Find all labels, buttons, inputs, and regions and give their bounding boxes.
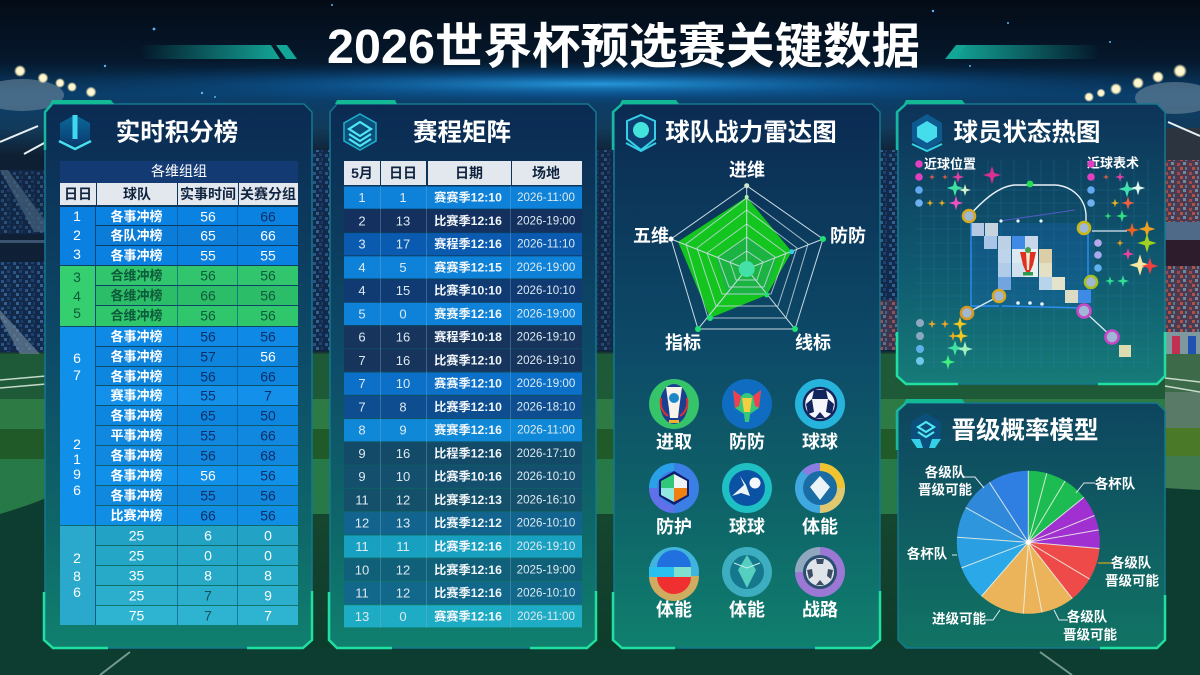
icon: schedule layers <box>344 114 376 150</box>
panel: radar <box>613 100 880 648</box>
legend: top left: 近球位置 <box>924 156 976 172</box>
table: schedule: 赛赛季12:16 <box>434 422 502 437</box>
table: schedule: 2026-10:10 <box>517 517 575 530</box>
rows: teal group: 9 <box>264 588 272 604</box>
table: schedule: 日日 <box>389 165 417 181</box>
rows: light blue group: 56 <box>260 468 276 484</box>
table: standings: 2 <box>73 436 81 452</box>
rows: green group: 合维冲榜 <box>110 308 163 323</box>
heading: radar: 球队战力雷达图 <box>665 118 837 146</box>
rows: light blue group: 56 <box>260 348 276 364</box>
table: schedule <box>344 161 582 628</box>
rows: green group: 56 <box>200 268 216 284</box>
table: schedule: 比程季12:16 <box>434 446 502 460</box>
rows: blue group: 各事冲榜 <box>110 248 163 263</box>
table: schedule: 2026-10:10 <box>517 586 575 600</box>
legend: top right: 近球表术 <box>1087 156 1139 170</box>
panel: standings <box>44 100 312 648</box>
table: schedule: 2026-11:00 <box>517 424 575 437</box>
pie chart: 各级队 <box>1111 554 1152 570</box>
icon: player hex <box>912 114 942 151</box>
icon: heatmap trophy <box>1020 247 1036 276</box>
pie chart: 晋级可能 <box>1105 572 1159 588</box>
rows: blue group: 66 <box>260 208 276 224</box>
label: protect: 防护 <box>656 516 692 537</box>
table: schedule: 10 <box>355 562 369 577</box>
label: stamina: 体能 <box>802 517 838 537</box>
table: schedule: 3 <box>358 237 366 252</box>
table: schedule: 2026-19:00 <box>517 261 575 274</box>
table: schedule: 2026-11:00 <box>517 610 575 623</box>
legend: bottom left <box>916 317 973 369</box>
rows: blue group: 65 <box>200 228 216 244</box>
table: schedule: 4 <box>358 283 366 298</box>
table: schedule: 比赛季10:10 <box>434 283 502 298</box>
rows: light blue group: 平事冲榜 <box>110 428 163 443</box>
table: schedule: 2026-10:10 <box>517 470 575 483</box>
table: schedule: 12 <box>396 562 410 577</box>
table: schedule: 8 <box>358 423 366 438</box>
heading: schedule: 赛程矩阵 <box>413 118 511 146</box>
label: defence: 防防 <box>729 431 765 452</box>
label: tactics: 战路 <box>802 600 838 620</box>
table: standings: 3 <box>73 246 81 262</box>
icon: tactics ball <box>795 547 845 597</box>
rows: light blue group: 55 <box>200 428 216 444</box>
heatmap chart <box>915 156 1158 370</box>
table: schedule: 12 <box>396 492 410 508</box>
table: schedule: 比赛季12:10 <box>434 399 502 414</box>
table: schedule: 7 <box>358 353 366 368</box>
table: schedule: 比赛季12:16 <box>434 562 502 577</box>
table: schedule: 16 <box>396 330 410 345</box>
icon: attack trophy <box>649 379 699 429</box>
table: standings: 6 <box>73 482 81 498</box>
table: schedule: 2 <box>358 213 366 228</box>
rows: light blue group <box>96 327 298 525</box>
table: schedule: 13 <box>396 516 410 531</box>
table: schedule: 13 <box>355 609 369 624</box>
table: standings: 2 <box>73 227 81 243</box>
title decoration: left bars <box>140 45 297 59</box>
rows: green group: 各维冲榜 <box>110 288 163 303</box>
table: standings: 关赛分组 <box>240 186 296 202</box>
radar chart: 线标 <box>795 333 831 353</box>
rows: light blue group: 各事冲榜 <box>110 408 163 423</box>
rows: teal group: 7 <box>204 588 212 604</box>
table: schedule: 赛赛季12:15 <box>434 259 502 274</box>
title decoration: right bars <box>945 45 1100 59</box>
table: schedule: 比赛季12:16 <box>434 213 502 228</box>
table: schedule: 赛程季10:18 <box>434 329 502 344</box>
table: schedule: 4 <box>358 260 366 275</box>
icon: shield <box>649 463 699 513</box>
table: schedule: 5月 <box>351 165 373 181</box>
rows: light blue group: 56 <box>200 368 216 384</box>
table: schedule: 2026-19:00 <box>517 377 575 390</box>
icon: defence trophy <box>722 379 772 429</box>
table: schedule: 11 <box>355 539 369 554</box>
table: schedule: 赛赛季12:16 <box>434 306 502 321</box>
table: schedule: 赛赛季12:10 <box>434 376 502 391</box>
rows: teal group: 25 <box>129 528 144 544</box>
rows: light blue group: 55 <box>200 388 216 404</box>
rows: light blue group: 56 <box>260 488 276 504</box>
table: schedule: 12 <box>355 516 369 531</box>
table: standings: 4 <box>73 288 81 304</box>
rows: teal group: 75 <box>129 608 144 624</box>
pie chart <box>907 464 1159 642</box>
table: standings: 8 <box>73 568 81 584</box>
icon: stamina diamond <box>795 463 845 513</box>
icon: stamina flag <box>649 547 699 601</box>
table: schedule: 15 <box>396 283 410 298</box>
table: schedule: 7 <box>358 400 366 414</box>
table: schedule: 10 <box>396 376 410 391</box>
table: standings: 1 <box>73 208 81 224</box>
label: ball: 球球 <box>802 432 838 452</box>
table: schedule: 赛程季12:16 <box>434 236 502 251</box>
table: schedule: 2025-19:00 <box>517 563 575 576</box>
pie chart: 各级队 <box>925 464 966 480</box>
rows: green group: 56 <box>260 288 276 304</box>
panel: player heatmap <box>897 100 1165 384</box>
rows: teal group <box>96 526 298 625</box>
pie chart: 晋级可能 <box>918 482 972 498</box>
rows: teal group: 7 <box>264 608 272 624</box>
icon grid <box>649 379 845 620</box>
rows: teal group: 6 <box>204 528 212 544</box>
radar chart: 防防 <box>830 225 866 246</box>
rows: teal group: 8 <box>204 568 212 584</box>
label: stamina 2: 体能 <box>656 600 692 620</box>
table: schedule: 2026-11:00 <box>517 191 575 204</box>
table: standings: 5 <box>73 305 81 321</box>
icon: stamina crystal <box>722 547 772 597</box>
table: schedule: 16 <box>396 446 410 461</box>
rows: light blue group: 各事冲榜 <box>110 468 163 483</box>
rows: light blue group: 56 <box>200 328 216 344</box>
legend: top right <box>1087 156 1145 222</box>
rows: light blue group: 各事冲榜 <box>110 448 163 463</box>
table: schedule: 0 <box>399 306 407 321</box>
rows: teal group: 8 <box>264 568 272 584</box>
rows: light blue group: 55 <box>200 488 216 504</box>
rows: blue group: 55 <box>260 248 276 264</box>
rows: light blue group: 68 <box>260 448 276 464</box>
table: standings: 球队 <box>123 186 151 202</box>
table: schedule: 赛赛季12:10 <box>434 190 502 205</box>
table: schedule: 2026-16:10 <box>517 494 575 506</box>
table: schedule: 13 <box>396 213 410 228</box>
rows: light blue group: 56 <box>200 448 216 464</box>
rows: light blue group: 66 <box>260 428 276 444</box>
table: standings: 日日 <box>64 186 92 202</box>
rows: light blue group: 66 <box>200 508 216 524</box>
table: standings: 7 <box>73 367 81 383</box>
table: schedule: 2026-19:10 <box>517 540 575 553</box>
table: standings: 6 <box>73 584 81 600</box>
table: standings <box>60 161 298 625</box>
table: schedule: 11 <box>355 586 369 600</box>
table: schedule: 8 <box>399 400 407 414</box>
rows: green group <box>96 266 298 326</box>
table: schedule: 7 <box>358 376 366 391</box>
rows: light blue group: 65 <box>200 408 216 424</box>
table: standings: 3 <box>73 269 81 285</box>
rows: teal group: 0 <box>264 548 272 564</box>
table: schedule: 9 <box>358 446 366 461</box>
pie chart: 进级可能 <box>932 610 986 626</box>
heading: standings: 实时积分榜 <box>116 118 238 146</box>
table: standings: 实事时间 <box>180 186 236 202</box>
rows: teal group: 25 <box>129 588 144 604</box>
rows: light blue group: 56 <box>200 468 216 484</box>
rows: green group: 66 <box>200 288 216 304</box>
rows: light blue group: 56 <box>260 328 276 344</box>
table: schedule: 11 <box>355 492 369 508</box>
table: schedule: 赛赛季12:16 <box>434 608 502 623</box>
table: standings: 1 <box>73 451 81 467</box>
table: standings: 6 <box>73 350 81 366</box>
rows: light blue group: 各事冲榜 <box>110 369 163 384</box>
icon: standings hex <box>59 115 91 149</box>
title: 2026世界杯预选赛关键数据 <box>327 20 920 74</box>
table: schedule: 1 <box>358 190 366 205</box>
table: standings: 2 <box>73 550 81 566</box>
rows: green group: 56 <box>260 308 276 324</box>
panel: schedule <box>329 100 596 648</box>
rows: light blue group: 各事冲榜 <box>110 329 163 344</box>
table: schedule: 2026-19:10 <box>517 354 575 367</box>
rows: green group: 56 <box>260 268 276 284</box>
table: schedule: 比赛季12:16 <box>434 585 502 600</box>
rows: green group: 56 <box>200 308 216 324</box>
table: schedule: 11 <box>396 539 410 554</box>
rows: light blue group: 赛事冲榜 <box>110 388 163 403</box>
label: ball skill: 球球 <box>729 517 765 537</box>
table: schedule: 场地 <box>532 165 560 181</box>
icon: probability hex <box>911 413 941 449</box>
legend: middle right <box>1094 221 1158 287</box>
table: schedule: 2026-10:10 <box>517 284 575 297</box>
label: attack: 进取 <box>656 432 692 452</box>
rows: blue group: 各事冲榜 <box>110 209 163 224</box>
rows: blue group: 各队冲榜 <box>110 228 163 243</box>
table: standings: 9 <box>73 466 81 482</box>
rows: light blue group: 57 <box>200 348 216 364</box>
rows: green group: 合维冲榜 <box>110 268 163 283</box>
heading: heatmap: 球员状态热图 <box>954 118 1100 146</box>
rows: light blue group: 50 <box>260 408 276 424</box>
table: schedule: 比赛季12:12 <box>434 515 502 530</box>
table: schedule: 2026-11:10 <box>517 238 575 251</box>
table: schedule: 2026-19:10 <box>517 331 575 344</box>
radar chart: 进维 <box>729 160 765 180</box>
rows: light blue group: 56 <box>260 508 276 524</box>
table: schedule: 5 <box>399 260 407 275</box>
rows: teal group: 0 <box>204 548 212 564</box>
rows: light blue group: 比赛冲榜 <box>110 508 163 523</box>
rows: blue group: 56 <box>200 208 216 224</box>
table: schedule: 1 <box>399 190 407 205</box>
rows: light blue group: 7 <box>264 388 272 404</box>
radar chart: 指标 <box>665 332 701 353</box>
table: schedule: 日期 <box>455 165 483 181</box>
rows: light blue group: 各事冲榜 <box>110 349 163 364</box>
table: schedule: 2026-19:00 <box>517 307 575 320</box>
heading: probability: 晋级概率模型 <box>952 416 1098 444</box>
rows: blue group: 66 <box>260 228 276 244</box>
table: schedule: 比赛季10:16 <box>434 469 502 484</box>
label: stamina 3: 体能 <box>729 600 765 620</box>
rows: teal group: 7 <box>204 608 212 624</box>
rows: teal group: 35 <box>129 568 144 584</box>
rows: blue group: 55 <box>200 248 216 264</box>
table: schedule: 2026-19:00 <box>517 214 575 227</box>
table: schedule: 比赛季12:16 <box>434 538 502 554</box>
table: schedule: 5 <box>358 306 366 321</box>
table: schedule: 9 <box>358 469 366 484</box>
rows: teal group: 25 <box>129 548 144 564</box>
table: schedule: 2026-18:10 <box>517 400 575 414</box>
table: schedule: 10 <box>396 469 410 484</box>
icon: kick <box>722 463 772 513</box>
pie chart: 各杯队 <box>907 546 948 562</box>
pie chart: 晋级可能 <box>1063 626 1117 642</box>
rows: blue group <box>96 207 298 265</box>
rows: teal group: 0 <box>264 528 272 544</box>
table: schedule: 比赛季12:13 <box>434 492 502 507</box>
table: schedule: 12 <box>396 586 410 600</box>
table: schedule: 比赛季12:10 <box>434 352 502 367</box>
pie chart: 各杯队 <box>1095 476 1136 492</box>
panel: promotion probability <box>897 399 1165 648</box>
rows: light blue group: 各事冲榜 <box>110 488 163 503</box>
table: schedule: 6 <box>358 330 366 345</box>
legend: top left <box>915 156 976 210</box>
rows: light blue group: 66 <box>260 368 276 384</box>
table: standings: 各维组组 <box>151 163 207 179</box>
table: schedule: 0 <box>399 609 407 624</box>
icon: football <box>795 379 845 429</box>
table: schedule: 2026-17:10 <box>517 447 575 460</box>
icon: radar shield <box>626 115 656 151</box>
table: schedule: 9 <box>399 423 407 438</box>
radar chart: 五维 <box>633 226 669 246</box>
radar chart <box>633 160 866 353</box>
pie chart: 各级队 <box>1067 608 1108 624</box>
table: schedule: 17 <box>396 237 410 252</box>
table: schedule: 16 <box>396 353 410 368</box>
